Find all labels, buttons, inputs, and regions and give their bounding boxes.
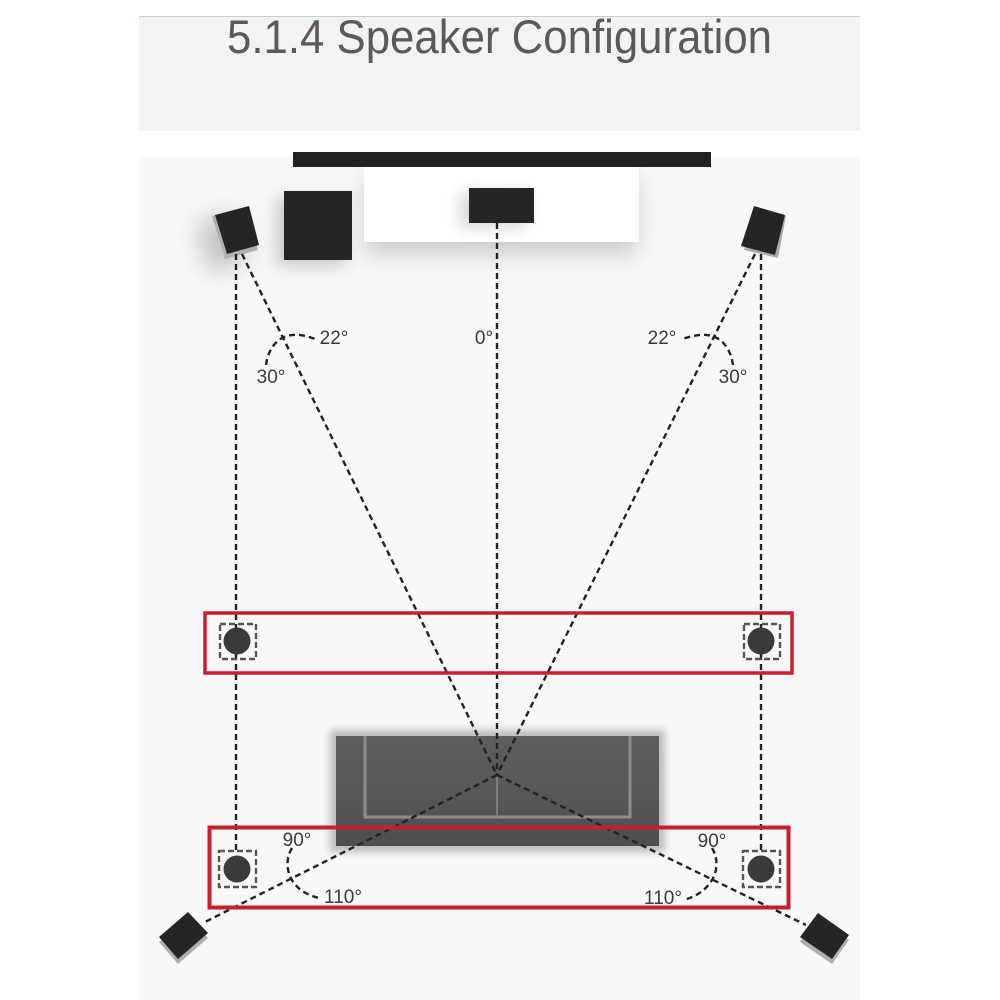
angle labels: 90° <box>698 831 726 852</box>
angle labels: 22° <box>648 328 676 349</box>
ceiling speaker: front right <box>744 624 780 659</box>
front left speaker <box>196 206 259 272</box>
room floor panel <box>139 157 860 1000</box>
rear right speaker <box>800 913 849 964</box>
front right speaker <box>741 206 786 258</box>
ceiling speaker: rear left <box>219 851 256 887</box>
angle labels: 22° <box>320 328 348 349</box>
angle arc: front left <box>266 335 315 365</box>
angle labels: 30° <box>719 367 747 388</box>
angle arc: front right <box>682 335 733 365</box>
red highlight: front height speakers <box>205 613 792 673</box>
red highlight: rear height speakers <box>210 828 788 908</box>
television <box>293 152 711 167</box>
speaker axis dashed lines <box>203 223 806 925</box>
title panel <box>139 16 860 131</box>
media console <box>364 167 639 254</box>
ceiling speaker: front left <box>220 624 256 659</box>
sofa <box>330 730 665 852</box>
angle labels <box>257 328 747 909</box>
title: 5.1.4 Speaker Configuration <box>227 10 772 63</box>
angle arc: rear left <box>288 848 319 898</box>
ceiling speaker: rear right <box>743 851 780 887</box>
center speaker <box>460 188 534 227</box>
angle labels: 0° <box>475 328 493 349</box>
angle labels: 110° <box>644 888 682 909</box>
angle labels: 30° <box>257 367 285 388</box>
subwoofer <box>276 191 352 266</box>
angle labels: 90° <box>283 830 311 851</box>
angle arc: rear right <box>683 848 716 900</box>
angle labels: 110° <box>324 887 362 908</box>
rear left speaker <box>159 912 208 964</box>
